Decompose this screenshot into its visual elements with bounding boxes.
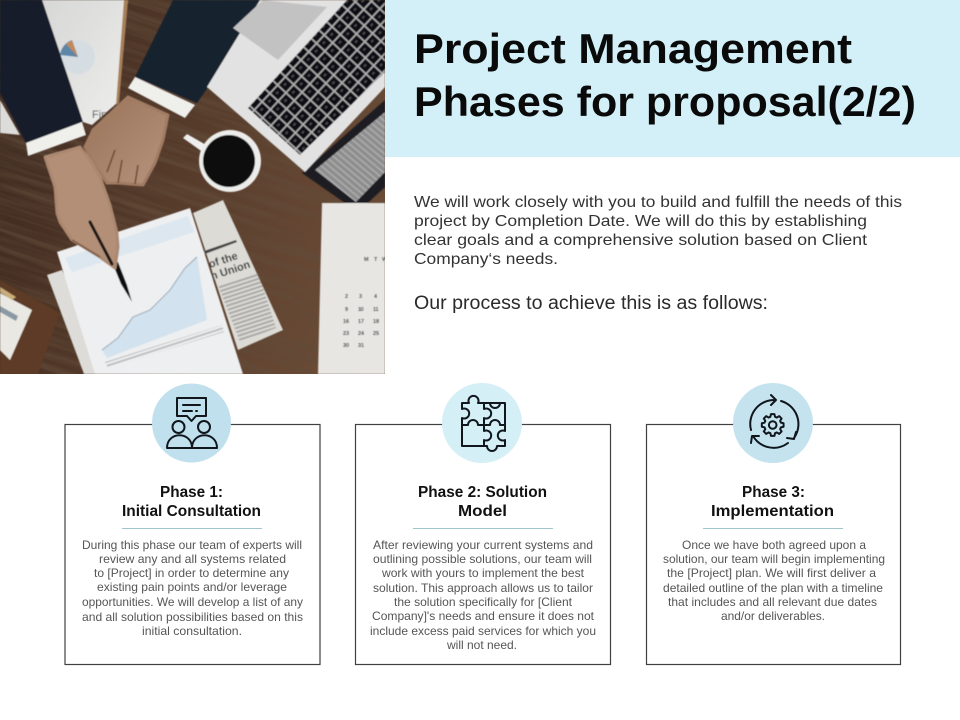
calendar: 3031 bbox=[343, 343, 364, 349]
intro paragraph: Company‘s needs. bbox=[414, 251, 558, 268]
intro paragraph: project by Completion Date. We will do this by establishing bbox=[414, 213, 867, 230]
text: phase 3 description: the [Project] plan. We will first deliver a bbox=[667, 566, 876, 580]
paper underneath chart bbox=[46, 270, 96, 374]
text: phase 2 description: include excess paid services for which you bbox=[370, 624, 596, 638]
heading: phase 1: Initial Consultation bbox=[122, 503, 261, 520]
laptop bbox=[207, 0, 385, 212]
text: phase 2 description: will not need. bbox=[446, 638, 517, 652]
document with pie chart bbox=[0, 0, 128, 135]
text: phase 1 description: During this phase our team of experts will bbox=[82, 538, 302, 552]
panel: phase 3 bbox=[646, 383, 900, 664]
line chart report bbox=[57, 208, 243, 374]
text: phase 3 description: that includes and all relevant due dates bbox=[668, 595, 877, 609]
heading: phase 2: Phase 2: Solution bbox=[418, 484, 547, 501]
title: Phases for proposal(2/2) bbox=[414, 78, 916, 125]
icon: consultation bbox=[152, 384, 231, 462]
photo: businessman reviewing charts at a wooden desk bbox=[0, 0, 385, 374]
icon: gear cycle bbox=[733, 383, 813, 463]
text: phase 1 description bbox=[82, 538, 303, 638]
process lead-in: Our process to achieve this is as follows: bbox=[414, 293, 768, 314]
text: phase 1 description: existing pain points and/or leverage bbox=[97, 580, 287, 594]
right suit sleeve bbox=[128, 0, 260, 118]
text: phase 3 description: detailed outline of the plan with a timeline bbox=[663, 581, 883, 595]
text: phase 2 description: solution. This approach allows us to tailor bbox=[373, 581, 593, 595]
panel: phase 1 bbox=[65, 384, 320, 664]
leather folder and note bbox=[0, 280, 60, 374]
text: phase 3 description: solution, our team will begin implementing bbox=[663, 552, 885, 566]
lower hand holding pen bbox=[45, 147, 118, 268]
heading: phase 1: Phase 1: bbox=[160, 484, 223, 501]
text: phase 1 description: initial consultation. bbox=[142, 624, 242, 638]
text: phase 3 description bbox=[663, 538, 885, 623]
title bbox=[414, 25, 916, 125]
heading: phase 3: Phase 3: bbox=[742, 484, 805, 501]
title: Project Management bbox=[414, 25, 852, 72]
upper hand bbox=[85, 97, 168, 185]
intro paragraph: clear goals and a comprehensive solution based on Client bbox=[414, 232, 868, 249]
text: phase 1 description: review any and all systems related bbox=[99, 552, 286, 566]
calendar: MTW bbox=[364, 257, 388, 263]
heading: phase 3 bbox=[711, 484, 834, 520]
heading: phase 2 bbox=[418, 484, 547, 520]
document with pie chart: Fin bbox=[92, 109, 107, 121]
intro paragraph bbox=[414, 194, 902, 268]
left suit sleeve bbox=[0, 0, 86, 156]
text: phase 2 description: After reviewing your current systems and bbox=[373, 538, 593, 552]
text: phase 2 description: Company]'s needs and ensure it does not bbox=[372, 609, 595, 623]
text: phase 2 description bbox=[370, 538, 596, 652]
text: phase 2 description: outlining possible solutions, our team will bbox=[373, 552, 592, 566]
calendar bbox=[318, 203, 388, 374]
title banner bbox=[385, 0, 960, 157]
text: phase 3 description: Once we have both agreed upon a bbox=[682, 538, 866, 552]
text: phase 2 description: work with yours to implement the best bbox=[381, 566, 585, 580]
heading: phase 2: Model bbox=[458, 503, 507, 520]
text: phase 1 description: to [Project] in order to determine any bbox=[94, 566, 289, 580]
calendar: 161718 bbox=[343, 319, 379, 325]
pen bbox=[112, 262, 132, 302]
heading: phase 1 bbox=[122, 484, 261, 520]
panel: phase 2 bbox=[356, 383, 610, 664]
text: phase 2 description: the solution specifically for [Client bbox=[394, 595, 573, 609]
calendar: 91011 bbox=[345, 307, 379, 313]
intro paragraph: We will work closely with you to build and fulfill the needs of this bbox=[414, 194, 902, 211]
icon: puzzle bbox=[442, 383, 522, 463]
coffee cup bbox=[183, 130, 261, 192]
newspaper bbox=[193, 200, 283, 350]
text: phase 3 description: and/or deliverables. bbox=[721, 609, 825, 623]
newspaper: n Union bbox=[209, 259, 252, 283]
calendar: 234 bbox=[345, 294, 378, 300]
newspaper: of the bbox=[207, 250, 239, 271]
text: phase 1 description: and all solution possibilities based on this bbox=[82, 610, 303, 624]
text: phase 1 description: opportunities. We will develop a list of any bbox=[82, 595, 303, 609]
calendar: 232425 bbox=[343, 331, 379, 337]
heading: phase 3: Implementation bbox=[711, 503, 834, 520]
